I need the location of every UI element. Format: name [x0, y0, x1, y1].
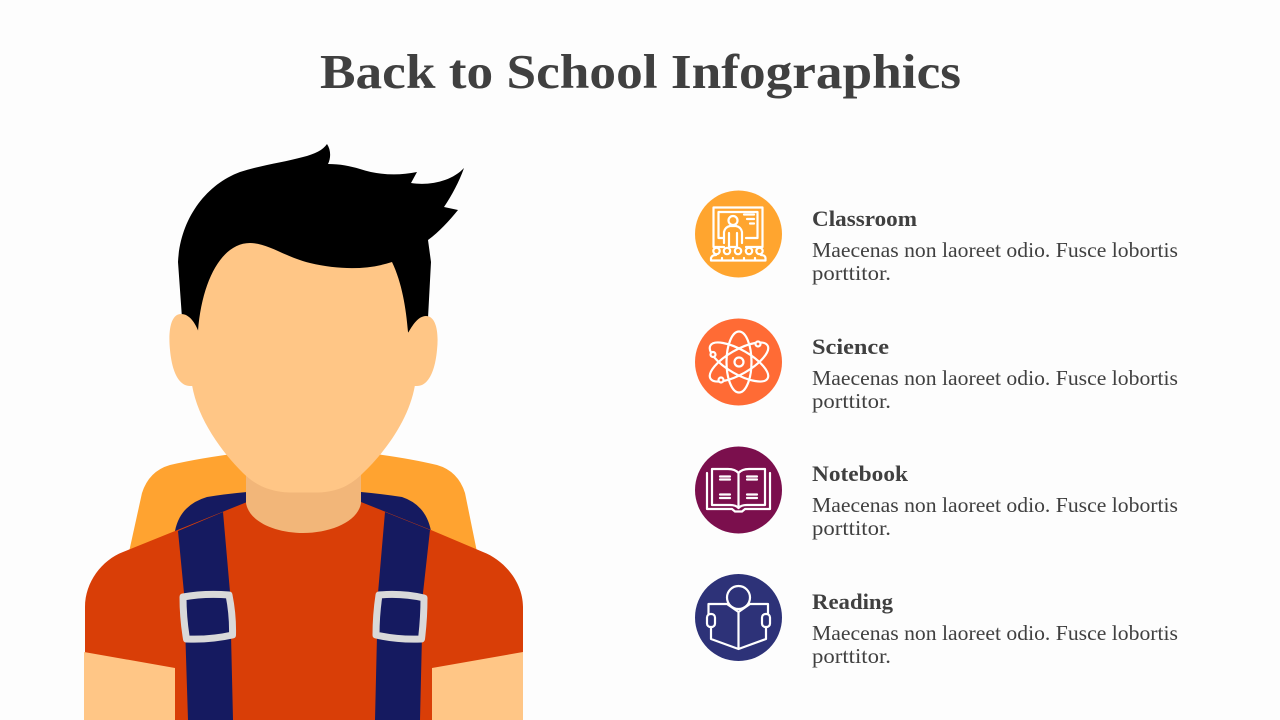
neck: [246, 470, 361, 533]
description: [812, 493, 1178, 540]
hair: [178, 144, 464, 340]
item: notebook: [695, 446, 1178, 540]
description: porttitor.: [812, 516, 891, 540]
icon: atom: [695, 318, 782, 406]
left buckle: [183, 594, 233, 639]
heading: Notebook: [812, 461, 909, 486]
icon: person reading: [695, 574, 782, 661]
heading: Science: [812, 334, 889, 359]
item: science: [695, 318, 1178, 413]
description: Maecenas non laoreet odio. Fusce lobortis: [812, 238, 1178, 262]
description: porttitor.: [812, 389, 891, 413]
description: Maecenas non laoreet odio. Fusce lobortis: [812, 621, 1178, 645]
item: classroom: [695, 190, 1178, 285]
description: Maecenas non laoreet odio. Fusce lobortis: [812, 493, 1178, 517]
item: reading: [695, 574, 1178, 668]
icon: open book: [695, 446, 782, 534]
title: Back to School Infographics: [320, 44, 961, 99]
heading: Reading: [812, 589, 893, 614]
heading: Classroom: [812, 206, 917, 231]
description: [812, 621, 1178, 668]
description: [812, 238, 1178, 285]
description: [812, 366, 1178, 413]
student illustration: [84, 144, 523, 720]
face: [192, 243, 415, 492]
description: Maecenas non laoreet odio. Fusce lobortis: [812, 366, 1178, 390]
left arm: [84, 652, 175, 720]
description: porttitor.: [812, 644, 891, 668]
right ear: [400, 316, 438, 386]
description: porttitor.: [812, 261, 891, 285]
backpack: [129, 453, 477, 552]
backpack collar strap: [175, 492, 431, 531]
left strap: [178, 512, 233, 720]
right buckle: [376, 594, 424, 639]
right strap: [375, 512, 430, 720]
right arm: [432, 652, 523, 720]
left ear: [169, 314, 205, 386]
icon: classroom: [695, 190, 782, 278]
shirt: [85, 502, 523, 720]
